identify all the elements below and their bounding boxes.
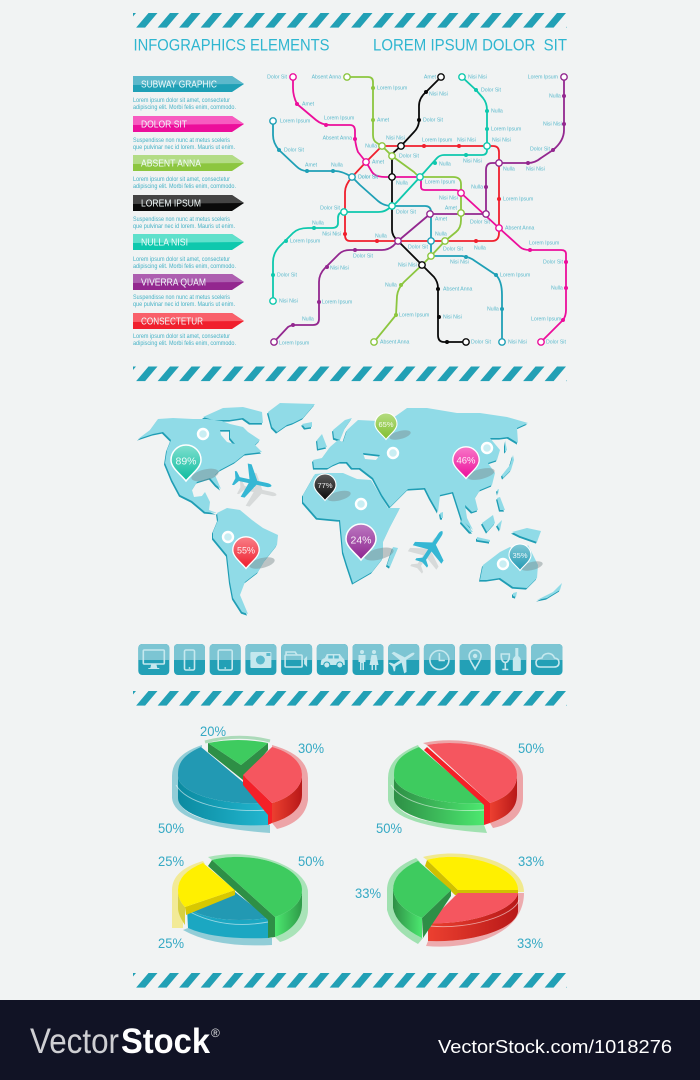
station dots — [271, 86, 568, 344]
station labels: Lorem Ipsum — [322, 300, 352, 306]
legend item: subway graphic: adipiscing elit. Morbi felis enim, commodo. — [133, 105, 236, 111]
station labels: Lorem Ipsum — [422, 138, 452, 144]
station labels: Dolor Sit — [471, 340, 491, 346]
icon: cloud — [531, 644, 562, 675]
label: 30%: 30% — [298, 740, 324, 756]
legend item: consectetur — [133, 313, 244, 347]
station labels: Nisi Nisi — [543, 122, 562, 128]
legend item: dolor sit: que pulvinar nec id lorem. Mauris ut enim. — [133, 145, 235, 151]
legend item: lorem ipsum — [133, 195, 244, 230]
station labels: Nisi Nisi — [279, 298, 298, 304]
legend item: lorem ipsum: Suspendisse non nunc at metus sceleris — [133, 217, 230, 223]
station labels: Nulla — [312, 220, 324, 226]
station labels: Lorem Ipsum — [531, 316, 561, 322]
station labels: Dolor Sit — [277, 272, 297, 278]
station labels: Nisi Nisi — [439, 196, 458, 202]
station labels: Dolor Sit — [408, 244, 428, 250]
pie chart: 50 / 25 / 25 — [158, 853, 324, 951]
pie slice: green 20% — [205, 737, 270, 780]
subway line: black — [392, 77, 466, 342]
label: 33% left: 33% — [355, 885, 381, 901]
icon: location pin — [460, 644, 491, 675]
station labels: Nulla — [474, 246, 486, 252]
legend item: viverra quam — [133, 274, 244, 308]
subway line: magenta — [293, 77, 566, 342]
station labels — [267, 74, 566, 346]
station labels: Nulla — [396, 180, 408, 186]
legend item: subway graphic: Lorem ipsum dolor sit amet, consectetur — [133, 98, 230, 104]
pin: 77%: 77% — [317, 481, 333, 490]
pin: 65% — [375, 413, 412, 442]
station labels: Nisi Nisi — [330, 266, 349, 272]
pie slice: green 33% — [387, 858, 451, 944]
pin: 77% — [314, 474, 352, 503]
station labels: Nisi Nisi — [443, 314, 462, 320]
legend item: consectetur: Lorem ipsum dolor sit amet, consectetur — [133, 334, 230, 340]
pie slice: blue 50% — [172, 745, 270, 833]
legend item: absent anna: Lorem ipsum dolor sit amet, consectetur — [133, 177, 230, 183]
icon: clock — [424, 644, 455, 675]
pie slice: yellow 33% — [423, 854, 524, 895]
station labels: Nulla — [302, 316, 314, 322]
logo: VectorStock: Stock — [121, 1022, 210, 1061]
label: 50%: 50% — [298, 853, 324, 869]
location rings — [198, 429, 508, 569]
station labels: Dolor Sit — [358, 174, 378, 180]
station labels: Nisi Nisi — [457, 138, 476, 144]
logo: VectorStock: Vector — [30, 1022, 119, 1061]
station labels: Nulla — [435, 232, 447, 238]
subway line: turquoise — [273, 77, 487, 301]
title: right heading: LOREM IPSUM DOLOR SIT — [373, 36, 567, 54]
legend item: absent anna: adipiscing elit. Morbi felis enim, commodo. — [133, 184, 236, 190]
station labels: Lorem Ipsum — [324, 116, 354, 122]
pin: 46% — [453, 447, 496, 482]
pin: 24% — [346, 524, 395, 563]
station labels: Lorem Ipsum — [280, 118, 310, 124]
station labels: Lorem Ipsum — [503, 196, 533, 202]
legend item: dolor sit: DOLOR SIT — [141, 120, 187, 130]
icon: phone — [174, 644, 205, 675]
legend item: lorem ipsum: que pulvinar nec id lorem. Mauris ut enim. — [133, 224, 235, 230]
label: 20%: 20% — [200, 723, 226, 739]
station labels: Amet — [424, 74, 437, 80]
station labels: Lorem Ipsum — [528, 74, 558, 80]
station labels: Dolor Sit — [546, 340, 566, 346]
station labels: Nisi Nisi — [492, 138, 511, 144]
icon: car — [317, 644, 348, 675]
station labels: Nulla — [491, 108, 503, 114]
station labels: Absent Anna — [380, 340, 410, 346]
station labels: Dolor Sit — [543, 260, 563, 266]
station labels: Dolor Sit — [423, 118, 443, 124]
subway map — [267, 74, 568, 347]
icon: plane over Atlantic — [230, 461, 280, 512]
station labels: Amet — [377, 118, 390, 124]
pin: 55% — [233, 537, 276, 571]
pin: 65%: 65% — [378, 420, 394, 429]
pie slice: red 30% — [243, 745, 308, 829]
station labels: Dolor Sit — [267, 74, 288, 80]
pie slice: green 50% — [388, 745, 487, 833]
legend item: absent anna — [133, 155, 244, 190]
label: 50%: 50% — [158, 820, 184, 836]
legend item: consectetur: adipiscing elit. Morbi felis enim, commodo. — [133, 341, 236, 347]
pin: 35% — [509, 544, 544, 573]
station labels: Nisi Nisi — [429, 92, 448, 98]
label: 25% bottom: 25% — [158, 935, 184, 951]
icon: plane over Indian Ocean — [402, 522, 457, 579]
station labels: Amet — [435, 216, 448, 222]
station labels: Nulla — [549, 94, 561, 100]
label: 25% top: 25% — [158, 853, 184, 869]
station labels: Amet — [372, 160, 385, 166]
station labels: Nulla — [375, 234, 387, 240]
legend item: nulla nisi: NULLA NISI — [141, 238, 188, 248]
icon: monitor — [138, 644, 169, 675]
stripe divider: below icons — [133, 691, 567, 706]
footer image id: VectorStock.com/1018276 — [438, 1036, 672, 1057]
icon row — [138, 643, 563, 678]
station labels: Absent Anna — [312, 74, 341, 80]
pie chart: 50 / 30 / 20 — [158, 723, 324, 836]
legend item: subway graphic — [133, 76, 244, 111]
station labels: Nulla — [365, 144, 377, 150]
station labels: Lorem Ipsum — [500, 272, 530, 278]
label: 33% bottom right: 33% — [517, 935, 543, 951]
interchange stations — [270, 74, 567, 345]
station labels: Lorem Ipsum — [290, 238, 320, 244]
station labels: Dolor Sit — [353, 254, 373, 260]
pin: 35%: 35% — [512, 551, 528, 560]
legend item: viverra quam: VIVERRA QUAM — [141, 278, 206, 288]
station labels: Absent Anna — [323, 136, 352, 142]
icon: video camera — [281, 644, 312, 675]
icon: tablet — [210, 644, 241, 675]
station labels: Lorem Ipsum — [491, 126, 521, 132]
station labels: Dolor Sit — [358, 174, 379, 180]
legend item: nulla nisi: adipiscing elit. Morbi felis enim, commodo. — [133, 264, 236, 270]
station labels: Nisi Nisi — [463, 158, 482, 164]
station labels: Nulla — [551, 286, 563, 292]
station labels: Nulla — [439, 162, 451, 168]
station labels: Nisi Nisi — [386, 136, 405, 142]
pie slice: red 50% — [423, 740, 523, 828]
map shadow edge — [137, 405, 561, 616]
legend item: nulla nisi — [133, 234, 244, 270]
station labels: Dolor Sit — [320, 206, 341, 212]
subway line: lime — [347, 77, 461, 342]
stripe divider: bottom — [133, 973, 567, 988]
station labels: Nulla — [503, 166, 515, 172]
subway line: purple — [274, 77, 564, 342]
legend item: viverra quam: que pulvinar nec id lorem. Mauris ut enim. — [133, 302, 235, 308]
map landmass — [138, 403, 562, 614]
title: left heading: INFOGRAPHICS ELEMENTS — [134, 36, 330, 54]
station labels: Lorem Ipsum — [529, 240, 559, 246]
station labels: Dolor Sit — [443, 246, 463, 252]
station labels: Lorem Ipsum — [377, 86, 407, 92]
station labels: Dolor Sit — [470, 220, 490, 226]
station labels: Nisi Nisi — [508, 340, 527, 346]
icon: camera — [245, 644, 276, 675]
station labels: Dolor Sit — [399, 154, 419, 160]
station labels: Nulla — [487, 306, 499, 312]
legend item: lorem ipsum: LOREM IPSUM — [141, 198, 201, 210]
station labels: Nisi Nisi — [468, 74, 487, 80]
pie slice: blue 25% — [183, 892, 272, 945]
station labels: Nulla — [385, 282, 397, 288]
pie slice: green 50% — [208, 854, 308, 942]
station labels: Lorem Ipsum — [425, 180, 455, 186]
station labels: Nulla — [471, 184, 483, 190]
logo: VectorStock — [30, 1022, 220, 1061]
pie chart: 33 / 33 / 33 — [355, 853, 544, 951]
station labels: Dolor Sit — [284, 148, 304, 154]
station labels: Amet — [305, 162, 318, 168]
legend item: dolor sit — [133, 116, 244, 151]
panel: legend — [133, 76, 244, 347]
legend item: viverra quam: Suspendisse non nunc at metus sceleris — [133, 295, 230, 301]
legend item: dolor sit: Suspendisse non nunc at metus sceleris — [133, 138, 230, 144]
stripe divider: top — [133, 13, 567, 28]
pin: 24%: 24% — [350, 534, 372, 546]
station labels: Nisi Nisi — [526, 166, 545, 172]
legend item: subway graphic: SUBWAY GRAPHIC — [141, 80, 217, 90]
station labels: Absent Anna — [505, 226, 535, 232]
logo: VectorStock: ® — [211, 1026, 220, 1040]
station labels: Lorem Ipsum — [399, 312, 429, 318]
pin: 89% — [171, 445, 220, 484]
pie chart: 50 / 50 — [376, 740, 544, 836]
footer bar — [0, 1000, 700, 1080]
icon: airplane — [385, 643, 421, 678]
label: 33% top right: 33% — [518, 853, 544, 869]
legend item: consectetur: CONSECTETUR — [141, 316, 203, 328]
pie slice: yellow 25% — [172, 861, 235, 928]
icon: wine glass and bottle — [495, 644, 526, 675]
station labels: Lorem Ipsum — [279, 340, 309, 346]
icon: people — [352, 644, 384, 675]
subway line: red — [345, 146, 499, 241]
station labels: Nisi Nisi — [322, 232, 341, 238]
station labels: Nulla — [331, 162, 343, 168]
pin: 89%: 89% — [175, 456, 197, 468]
pie slice: red 33% — [426, 893, 524, 947]
station labels: Absent Anna — [443, 286, 473, 292]
legend item: absent anna: ABSENT ANNA — [141, 158, 201, 170]
pin: 55%: 55% — [237, 546, 255, 556]
stripe divider: below subway — [133, 366, 567, 381]
pin: 46%: 46% — [456, 456, 476, 466]
station labels: Amet — [302, 102, 315, 108]
label: 50% left: 50% — [376, 820, 402, 836]
label: 50% right: 50% — [518, 740, 544, 756]
station labels: Dolor Sit — [530, 146, 550, 152]
legend item: nulla nisi: Lorem ipsum dolor sit amet, consectetur — [133, 257, 230, 263]
station labels: Dolor Sit — [481, 88, 501, 94]
subway line: teal — [273, 121, 502, 342]
station labels: Nisi Nisi — [450, 260, 469, 266]
station labels: Amet — [445, 206, 458, 212]
world map — [137, 403, 562, 616]
station labels: Nisi Nisi — [398, 262, 417, 268]
station labels: Dolor Sit — [396, 210, 416, 216]
